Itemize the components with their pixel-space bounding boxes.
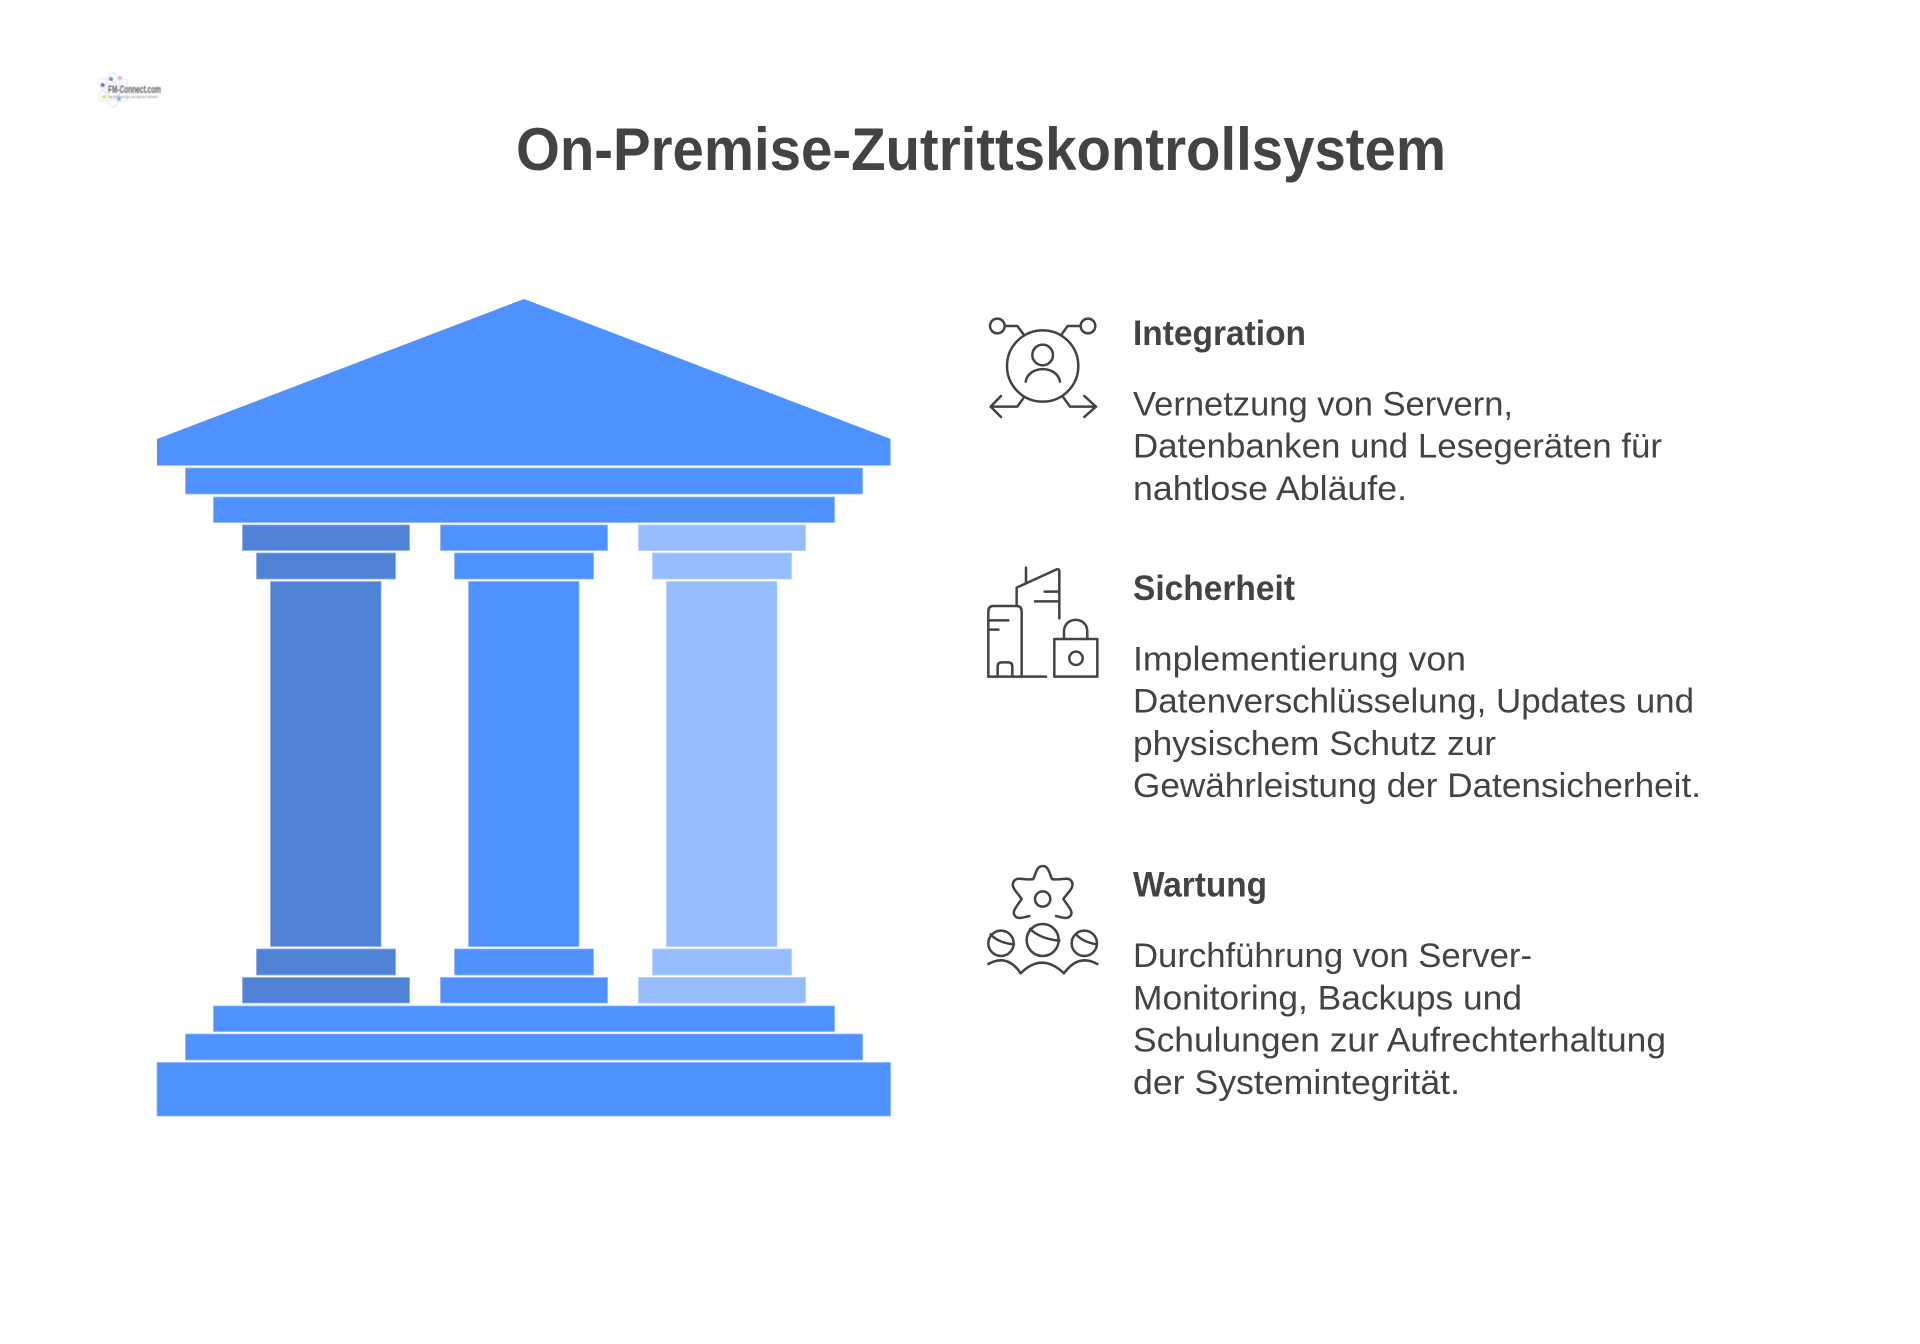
- heading: Wartung: Wartung: [1133, 866, 1267, 905]
- text: Wartung description: Schulungen zur Aufrechterhaltung: [1133, 1022, 1666, 1060]
- logo: FM-Connect: FM-Connect.com: [108, 84, 161, 96]
- heading: Sicherheit: Sicherheit: [1133, 569, 1295, 608]
- right pillar: [638, 525, 806, 1003]
- logo: FM-Connect: [95, 73, 161, 107]
- text: Sicherheit description: [1133, 641, 1701, 805]
- title: On-Premise-Zutrittskontrollsystem: [516, 115, 1446, 183]
- icon: maintenance gear with people: [988, 866, 1097, 973]
- roof pediment: [157, 299, 890, 466]
- heading: Integration: Integration: [1133, 314, 1306, 353]
- text: Sicherheit description: physischem Schutz zur: [1133, 725, 1496, 763]
- left pillar: [242, 525, 410, 1003]
- text: Integration description: Vernetzung von Servern,: [1133, 386, 1513, 424]
- middle pillar: [440, 525, 608, 1003]
- text: Sicherheit description: Datenverschlüsselung, Updates und: [1133, 683, 1694, 721]
- text: Wartung description: der Systemintegrität.: [1133, 1064, 1460, 1102]
- logo: FM-Connect: Das FM-Beratungs- und Ingenieur-Netzwerk: [108, 94, 158, 99]
- text: Sicherheit description: Gewährleistung der Datensicherheit.: [1133, 767, 1701, 805]
- temple diagram: [157, 299, 890, 1116]
- text: Integration description: nahtlose Abläufe.: [1133, 470, 1407, 508]
- text: Wartung description: Monitoring, Backups und: [1133, 980, 1522, 1018]
- icon: security buildings with lock: [988, 568, 1097, 677]
- text: Wartung description: Durchführung von Server-: [1133, 937, 1532, 975]
- text: Integration description: Datenbanken und Lesegeräten für: [1133, 428, 1662, 466]
- base steps: [157, 1006, 890, 1116]
- icon: integration network with person: [990, 319, 1096, 417]
- text: Wartung description: [1133, 937, 1666, 1102]
- text: Sicherheit description: Implementierung von: [1133, 641, 1466, 679]
- entablature steps: [186, 468, 862, 522]
- text: Integration description: [1133, 386, 1662, 508]
